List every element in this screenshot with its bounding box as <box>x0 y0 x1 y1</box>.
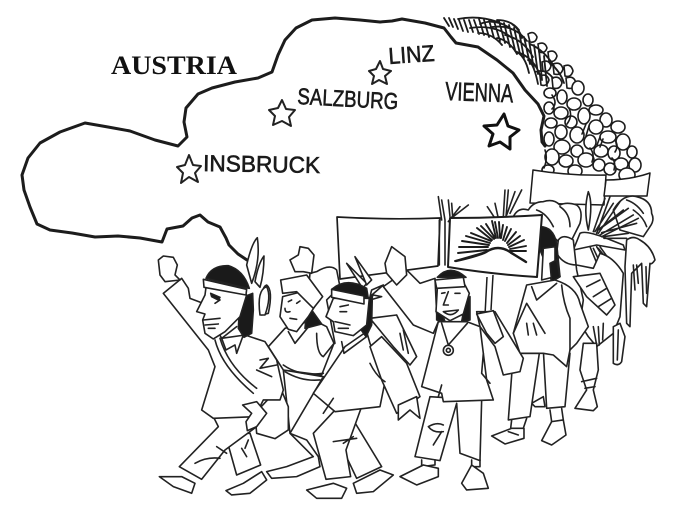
hand gripping pole <box>477 311 503 343</box>
necklace <box>442 323 467 345</box>
rear leg and boot <box>575 343 598 411</box>
head <box>280 290 317 332</box>
marchers on the right (zoom coordinates) <box>438 190 655 445</box>
feather tufts behind signs <box>438 190 522 265</box>
front leg <box>179 413 257 479</box>
legs <box>415 397 482 461</box>
sign board <box>448 215 542 277</box>
marcher behind sign: shoes <box>492 428 524 444</box>
city label: Vienna: VIENNA <box>445 76 514 108</box>
marcher behind sign: legs <box>508 353 539 420</box>
sleeve details <box>257 358 277 377</box>
hair top <box>437 270 466 277</box>
star: Vienna <box>484 114 519 149</box>
raised arm <box>383 270 438 333</box>
gripping hand <box>243 402 267 431</box>
shoes <box>159 477 195 493</box>
marcher 1 leading with raised fist <box>158 238 288 495</box>
fist <box>385 247 407 285</box>
belt <box>283 365 323 380</box>
headband <box>281 275 323 308</box>
marcher 2 with raised fist <box>261 247 340 478</box>
rear crowd blobs <box>513 201 581 250</box>
near crowd heads <box>542 81 641 182</box>
city label: Innsbruck: INSBRUCK <box>203 150 321 178</box>
sleeve <box>370 337 420 413</box>
head <box>326 298 369 336</box>
raised arm <box>307 267 340 350</box>
torso <box>268 320 334 375</box>
shoes <box>307 483 347 498</box>
headband <box>203 279 247 295</box>
rear banner left <box>530 170 606 205</box>
hair top <box>332 283 368 298</box>
far marcher body and fringe <box>625 237 655 327</box>
shirt <box>422 322 493 402</box>
mid-distance head loops <box>528 33 576 88</box>
feathers <box>247 238 258 283</box>
star: Salzburg <box>269 100 295 126</box>
shoulder strap <box>215 338 257 393</box>
long hair <box>238 293 253 337</box>
large blank protest sign <box>337 217 440 279</box>
title: AUSTRIA <box>111 51 237 80</box>
crowd shading strokes <box>544 95 617 170</box>
banner sign with radiating symbol <box>448 215 542 277</box>
marcher behind sign: torso <box>513 280 588 367</box>
side hair <box>437 297 470 322</box>
headband <box>332 289 364 304</box>
right sleeve pouch <box>255 387 288 439</box>
hair <box>305 310 322 328</box>
hand <box>398 397 420 420</box>
front leg <box>313 407 362 479</box>
shoes <box>400 465 438 485</box>
marcher 4 in front with medallion <box>383 247 523 490</box>
torso <box>313 332 385 412</box>
feathers <box>347 263 367 288</box>
crowd of marchers along the border <box>444 18 641 182</box>
hair <box>360 297 372 337</box>
rear banner right <box>604 173 650 196</box>
star: Innsbruck <box>177 155 201 183</box>
headband <box>435 277 465 288</box>
feathered marcher headdress <box>586 192 591 230</box>
collar and arm <box>288 325 334 357</box>
collar <box>222 327 243 353</box>
map outline of Austria <box>22 18 545 260</box>
face details <box>203 295 220 328</box>
hanging fringe <box>613 323 625 365</box>
hair top <box>206 266 249 288</box>
fist <box>290 247 314 273</box>
city label: Linz: LINZ <box>388 40 435 69</box>
back protest signs <box>530 170 650 205</box>
head and face <box>197 283 247 339</box>
back leg <box>340 420 382 478</box>
other arm sleeve <box>477 312 523 375</box>
head <box>436 285 469 321</box>
star: Linz <box>369 61 391 84</box>
radiating feather emblem <box>455 221 526 261</box>
sign poles <box>485 275 493 315</box>
fist <box>158 256 180 282</box>
shirt and raised arm <box>163 278 283 418</box>
backpack <box>370 315 417 365</box>
city label: Salzburg: SALZBURG <box>297 83 399 114</box>
back leg <box>225 433 261 475</box>
skirt and legs <box>267 370 323 478</box>
hidden marcher foot <box>532 397 545 407</box>
marcher 3 with backpack <box>307 257 420 498</box>
rear feather <box>261 285 270 315</box>
marcher behind sign: head <box>540 227 560 282</box>
distant crowd hatching <box>444 18 564 86</box>
feathered marcher body <box>557 237 623 347</box>
